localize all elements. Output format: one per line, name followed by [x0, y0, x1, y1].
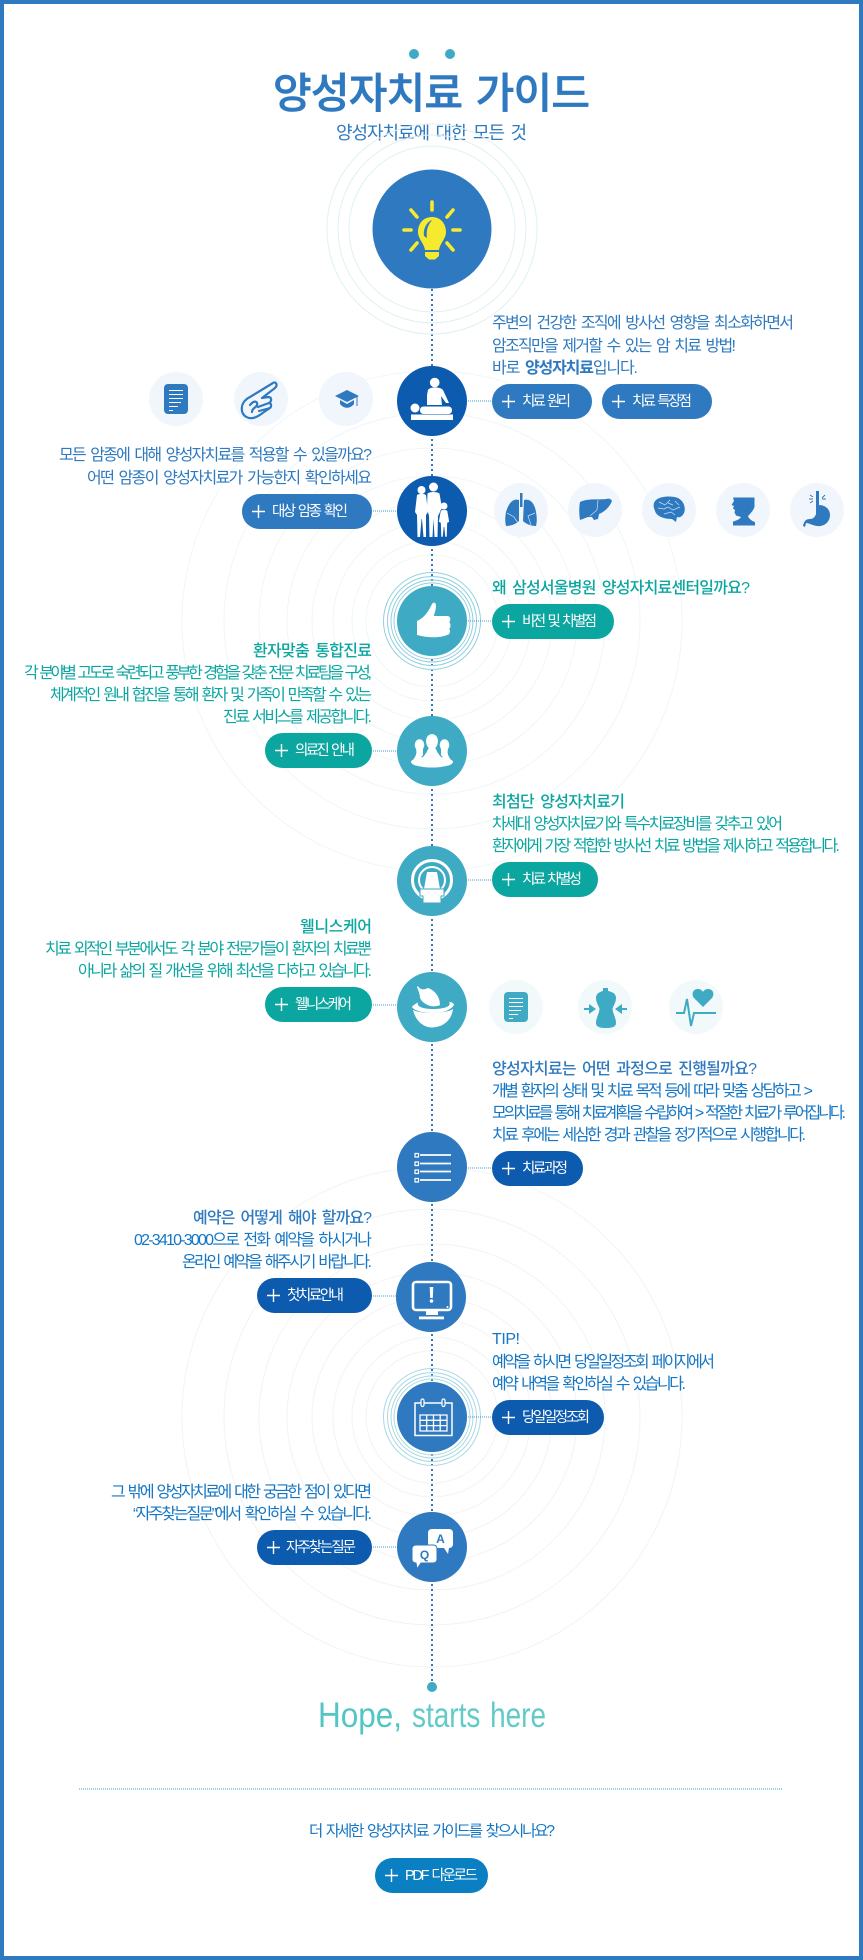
node: thumbs up [384, 572, 480, 670]
button: 치료 차별성 [492, 862, 598, 897]
connector [468, 400, 492, 402]
button: 대상 암종 확인 [242, 494, 372, 529]
button: 자주찾는질문 [257, 1530, 372, 1565]
text: treatment process: 개별 환자의 상태 및 치료 목적 등에 따라 맞춤 상담하고 > [492, 1082, 813, 1100]
text: integrated care: 각 분야별 고도로 숙련되고 풍부한 경험을 갖춘 전문 치료팀을 구성, [24, 664, 372, 682]
background rings behind calendar node [182, 1167, 682, 1667]
button: 비전 및 차별점: 비전 및 차별점 [522, 613, 597, 630]
text: integrated care: 체계적인 원내 협진을 통해 환자 및 가족이 만족할 수 있는 [50, 686, 372, 704]
connector [468, 879, 492, 881]
text: treatment process: 양성자치료는 어떤 과정으로 진행될까요? [492, 1060, 757, 1078]
icon circle: liver [568, 483, 622, 537]
icon: speech bubbles: Q [420, 1548, 429, 1562]
text: looking for guide: 더 자세한 양성자치료 가이드를 찾으시나요? [309, 1822, 555, 1840]
button: 당일일정조회: 당일일정조회 [522, 1409, 590, 1426]
text: wellness care: 아니라 삶의 질 개선을 위해 최선을 다하고 있습니다. [78, 962, 372, 980]
text: treatment process [492, 1060, 846, 1144]
node: treatment figure [397, 366, 467, 436]
icon circle: head and neck [716, 483, 770, 537]
subtitle: 양성자치료에 대한 모든 것 [336, 123, 527, 143]
button: 첫치료안내: 첫치료안내 [287, 1287, 344, 1304]
text: integrated care: 환자맞춤 통합진료 [253, 642, 372, 660]
button: 의료진 안내 [265, 733, 372, 768]
button: 웰니스케어 [265, 987, 372, 1022]
text: FAQ [111, 1483, 372, 1523]
divider [79, 1788, 783, 1790]
icon: monitor alert [413, 1282, 451, 1319]
connector [468, 620, 492, 622]
button: PDF download [375, 1858, 488, 1893]
icon circle: lungs [494, 483, 548, 537]
text: advanced equipment: 차세대 양성자치료기와 특수치료장비를 갖추고 있어 [492, 815, 783, 833]
text: proton therapy intro: 주변의 건강한 조직에 방사선 영향을 최소화하면서 [492, 314, 794, 332]
connector [373, 1004, 397, 1006]
icon circle: document [489, 980, 543, 1034]
text: how to book: 02-3410-3000으로 전화 예약을 하시거나 [134, 1231, 372, 1249]
hero lightbulb node [327, 124, 537, 334]
node: medical team [397, 716, 467, 786]
text: tip: 예약을 하시면 당일일정조회 페이지에서 [492, 1353, 715, 1371]
text: integrated care [24, 642, 372, 726]
text: tip: 예약 내역을 확인하실 수 있습니다. [492, 1375, 686, 1393]
node: checklist [397, 1132, 467, 1202]
button: 치료 특장점: 치료 특장점 [632, 393, 692, 410]
text: wellness care [45, 918, 372, 980]
text: FAQ: “자주찾는질문”에서 확인하실 수 있습니다. [133, 1505, 372, 1523]
button: 의료진 안내: 의료진 안내 [295, 742, 355, 759]
text: eligible cancers: 모든 암종에 대해 양성자치료를 적용할 수 있을까요? [59, 446, 372, 464]
icon: speech bubbles [412, 1529, 453, 1569]
connector [373, 1546, 397, 1548]
text: FAQ: 그 밖에 양성자치료에 대한 궁금한 점이 있다면 [111, 1483, 372, 1501]
button: 치료과정: 치료과정 [522, 1160, 568, 1177]
text: wellness care: 치료 외적인 부분에서도 각 분야 전문가들이 환자의 치료뿐 [45, 940, 372, 958]
icon: bowl [412, 986, 454, 1028]
icon circle: pointing hand [234, 372, 288, 426]
button: 비전 및 차별점 [492, 604, 614, 639]
icon: thumbs up [417, 603, 450, 637]
background rings behind thumb node [182, 371, 682, 871]
text: advanced equipment: 최첨단 양성자치료기 [492, 793, 625, 811]
connector [468, 1167, 492, 1169]
button: 자주찾는질문: 자주찾는질문 [286, 1539, 356, 1556]
button: 치료과정 [492, 1151, 583, 1186]
text: integrated care: 진료 서비스를 제공합니다. [223, 708, 372, 726]
node: calendar [384, 1368, 480, 1466]
text: why Samsung Medical Center: 왜 삼성서울병원 양성자치료센터일까요? [492, 579, 750, 597]
text: eligible cancers: 어떤 암종이 양성자치료가 가능한지 확인하세요 [87, 469, 372, 487]
text: advanced equipment: 환자에게 가장 적합한 방사선 치료 방법을 제시하고 적용합니다. [492, 837, 840, 855]
button: 치료 차별성: 치료 차별성 [522, 871, 582, 888]
button: 대상 암종 확인: 대상 암종 확인 [272, 503, 348, 520]
text: treatment process: 치료 후에는 세심한 경과 관찰을 정기적으로 시행합니다. [492, 1126, 806, 1144]
text: how to book: 예약은 어떻게 해야 할까요? [193, 1209, 372, 1227]
icon: therapist and patient [410, 378, 453, 420]
node: monitor [396, 1262, 466, 1332]
text: treatment process: 모의치료를 통해 치료계획을 수립하여 > 적절한 치료가 루어집니다. [492, 1104, 846, 1122]
icon: calendar [415, 1399, 452, 1436]
button: 치료 원리: 치료 원리 [522, 393, 571, 410]
button: PDF download: PDF 다운로드 [405, 1867, 478, 1884]
closing slogan [318, 1696, 546, 1735]
timeline end dot [427, 1682, 437, 1692]
icon circle: document [149, 372, 203, 426]
text: proton therapy intro [492, 314, 794, 377]
title: 양성자치료 가이드 [273, 70, 590, 117]
button: 첫치료안내 [257, 1278, 372, 1313]
icon: speech bubbles: A [436, 1532, 445, 1546]
text: tip [492, 1331, 715, 1393]
icon: list [415, 1154, 451, 1182]
timeline dotted axis [431, 289, 433, 1682]
icon: proton therapy machine [412, 860, 452, 903]
button: 당일일정조회 [492, 1400, 604, 1435]
connector [468, 1416, 492, 1418]
icon circle: body shape [578, 980, 632, 1034]
closing slogan: starts here [412, 1696, 546, 1735]
icon: lightbulb [404, 202, 460, 260]
top decorative dots [409, 49, 455, 59]
text: advanced equipment [492, 793, 840, 855]
icon circle: brain [642, 483, 696, 537]
icon circle: heart and pulse [669, 980, 723, 1034]
button: 웰니스케어: 웰니스케어 [295, 996, 352, 1013]
button: 치료 원리 [492, 384, 592, 419]
text: eligible cancers [59, 446, 372, 487]
connector [373, 510, 397, 512]
text: wellness care: 웰니스케어 [300, 918, 372, 936]
closing slogan: Hope, [318, 1696, 402, 1735]
icon: three people [411, 734, 453, 768]
text: proton therapy intro: 바로 양성자치료입니다. [492, 359, 638, 377]
connector [373, 750, 397, 752]
icon circle: graduation cap [319, 372, 373, 426]
text: how to book: 온라인 예약을 해주시기 바랍니다. [182, 1253, 372, 1271]
connector [373, 1295, 396, 1297]
icon circle: stomach [790, 483, 844, 537]
node: family [397, 476, 467, 546]
icon: family silhouettes [415, 482, 450, 537]
node: MRI machine [397, 846, 467, 916]
text: tip: TIP! [492, 1331, 520, 1348]
node: mortar and pestle [397, 972, 467, 1042]
node: Q and A [397, 1512, 467, 1582]
text: how to book [134, 1209, 372, 1271]
button: 치료 특장점 [602, 384, 712, 419]
text: proton therapy intro: 암조직만을 제거할 수 있는 암 치료 방법! [492, 337, 736, 355]
